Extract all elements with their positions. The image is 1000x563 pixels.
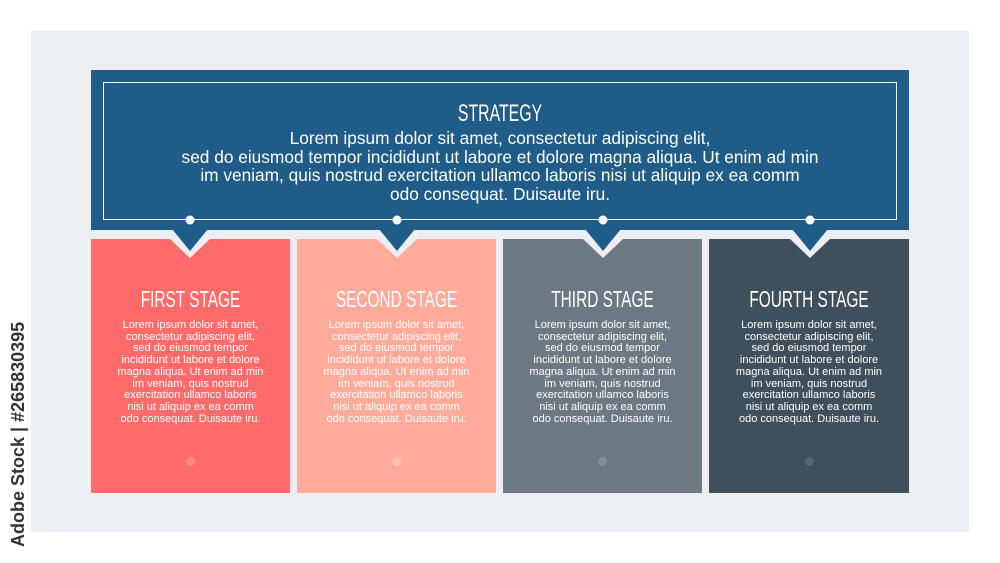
card: fourth stage: nisi ut aliquip ex ea comm <box>746 401 872 413</box>
card: first stage: im veniam, quis nostrud <box>132 378 249 390</box>
heading: strategy: STRATEGY <box>458 100 542 127</box>
card: second stage: sed do eiusmod tempor <box>339 342 454 354</box>
card: third stage: magna aliqua. Ut enim ad min <box>529 366 676 378</box>
inner border <box>103 82 897 220</box>
card: third stage: im veniam, quis nostrud <box>544 378 661 390</box>
cards <box>91 239 909 493</box>
card: fourth stage: FOURTH STAGE <box>749 286 869 312</box>
card: first stage: consectetur adipiscing elit, <box>126 331 255 343</box>
card: second stage: magna aliqua. Ut enim ad min <box>323 366 470 378</box>
panel: strategy <box>91 70 909 230</box>
card: second stage: exercitation ullamco laboris <box>330 389 463 401</box>
card: second stage: nisi ut aliquip ex ea comm <box>333 401 460 413</box>
card: fourth stage: magna aliqua. Ut enim ad min <box>736 366 882 378</box>
card: third stage: Lorem ipsum dolor sit amet, <box>535 319 670 331</box>
card: third stage: consectetur adipiscing elit, <box>538 331 667 343</box>
card: first stage <box>91 239 290 493</box>
card: fourth stage <box>709 239 909 493</box>
card: first stage: odo consequat. Duisaute iru. <box>120 413 261 425</box>
card: fourth stage: sed do eiusmod tempor <box>752 342 866 354</box>
card: third stage: THIRD STAGE <box>551 286 654 312</box>
card: first stage: sed do eiusmod tempor <box>133 342 248 354</box>
text: strategy description <box>182 128 818 204</box>
card: third stage: odo consequat. Duisaute iru. <box>532 413 673 425</box>
card: second stage: Lorem ipsum dolor sit amet, <box>329 319 464 331</box>
card: second stage: odo consequat. Duisaute iru. <box>326 413 467 425</box>
card: second stage: incididunt ut labore et dolore <box>327 354 466 366</box>
text: strategy description: im veniam, quis nostrud exercitation ullamco laboris nisi ut aliquip ex ea comm <box>200 165 800 185</box>
card: fourth stage: odo consequat. Duisaute iru. <box>739 413 879 425</box>
card: third stage: nisi ut aliquip ex ea comm <box>539 401 666 413</box>
text: strategy description: odo consequat. Duisaute iru. <box>390 184 610 204</box>
card: second stage: SECOND STAGE <box>336 286 457 312</box>
card: third stage <box>503 239 702 493</box>
card: fourth stage: Lorem ipsum dolor sit amet, <box>741 319 877 331</box>
card: first stage: exercitation ullamco laboris <box>124 389 257 401</box>
card: fourth stage: im veniam, quis nostrud <box>751 378 867 390</box>
card: first stage: incididunt ut labore et dolore <box>121 354 260 366</box>
card: third stage: exercitation ullamco laboris <box>536 389 669 401</box>
card: fourth stage: consectetur adipiscing elit, <box>744 331 874 343</box>
text: strategy description: sed do eiusmod tempor incididunt ut labore et dolore magna aliqua. Ut enim ad min <box>182 146 818 166</box>
card: second stage <box>297 239 496 493</box>
card: first stage: Lorem ipsum dolor sit amet, <box>123 319 258 331</box>
card: third stage: sed do eiusmod tempor <box>545 342 660 354</box>
card: second stage: im veniam, quis nostrud <box>338 378 455 390</box>
card: first stage: FIRST STAGE <box>141 286 240 312</box>
card: first stage: magna aliqua. Ut enim ad min <box>117 366 264 378</box>
card: first stage: nisi ut aliquip ex ea comm <box>127 401 254 413</box>
card: third stage: incididunt ut labore et dolore <box>533 354 672 366</box>
card: fourth stage: exercitation ullamco laboris <box>743 389 875 401</box>
watermark id: Adobe Stock | #265830395 <box>8 322 28 547</box>
card: second stage: consectetur adipiscing elit, <box>332 331 461 343</box>
text: strategy description: Lorem ipsum dolor sit amet, consectetur adipiscing elit, <box>290 128 710 148</box>
card: fourth stage: incididunt ut labore et dolore <box>740 354 878 366</box>
